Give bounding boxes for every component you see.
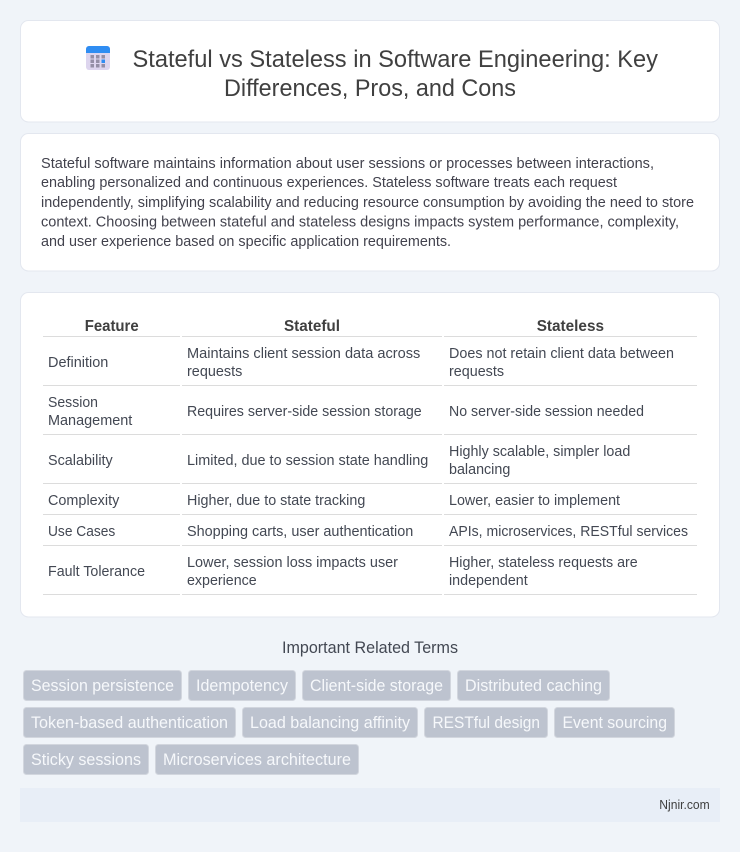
table row: Scalability: Limited, due to session state handling	[187, 453, 428, 469]
tag: Idempotency: Idempotency	[196, 677, 289, 695]
table row: Fault Tolerance: Higher, stateless requests are	[449, 555, 638, 571]
tag: Client-side storage: Client-side storage	[310, 677, 443, 695]
table row: Use Cases	[43, 524, 697, 546]
panel: header	[20, 20, 720, 122]
heading: important related terms: Important Related Terms	[282, 639, 458, 657]
title: Stateful vs Stateless in Software Engineering: Key	[132, 46, 659, 73]
table row: Fault Tolerance: independent	[449, 573, 528, 589]
table row: Definition	[43, 346, 697, 386]
text block: introduction paragraph: independently, simplifying scalability and reducing resource consumption by avoiding the need to store	[41, 195, 694, 211]
table row: Scalability: Highly scalable, simpler load	[449, 444, 630, 460]
panel: related term tags	[24, 670, 674, 774]
table row: Fault Tolerance: Lower, session loss impacts user	[187, 555, 398, 571]
table row: Scalability: Scalability	[48, 453, 113, 469]
table header row	[43, 318, 697, 337]
table row: Session Management: Session	[48, 395, 98, 411]
table row: Fault Tolerance: Fault Tolerance	[48, 564, 145, 580]
footer: Njnir.com	[659, 797, 710, 812]
tag: Load balancing affinity: Load balancing affinity	[250, 714, 411, 732]
table row: Scalability: balancing	[449, 462, 510, 478]
table row: Session Management: Management	[48, 413, 132, 429]
text block: introduction paragraph: Stateful software maintains information about user sessions or processes between interactions,	[41, 156, 654, 172]
table row: Complexity: Higher, due to state tracking	[187, 493, 365, 509]
tag: Token-based authentication: Token-based authentication	[31, 714, 228, 732]
table row: Complexity	[43, 493, 697, 515]
tag: Distributed caching: Distributed caching	[465, 677, 602, 695]
text block: introduction paragraph: context. Choosing between stateful and stateless designs impacts system performance, complexity,	[41, 214, 679, 230]
table row: Complexity: Lower, easier to implement	[449, 493, 620, 509]
tag: Idempotency	[188, 670, 296, 700]
table row: Use Cases: Use Cases	[48, 524, 115, 540]
panel: comparison table	[20, 292, 720, 617]
table header row: Feature	[85, 318, 139, 335]
title: Differences, Pros, and Cons	[224, 75, 516, 102]
table row: Definition: Does not retain client data between	[449, 346, 674, 362]
tag: Token-based authentication	[24, 708, 236, 738]
tag: Event sourcing: Event sourcing	[562, 714, 667, 732]
table row: Definition: Definition	[48, 355, 108, 371]
tag: Distributed caching	[458, 670, 610, 700]
tag: Event sourcing	[554, 708, 674, 738]
text block: introduction paragraph	[41, 156, 694, 250]
footer	[20, 788, 720, 822]
tag: Client-side storage	[302, 670, 450, 700]
tag: RESTful design	[424, 708, 548, 738]
table row: Session Management: No server-side session needed	[449, 404, 644, 420]
table row: Use Cases: Shopping carts, user authentication	[187, 524, 413, 540]
title	[132, 46, 659, 102]
table row: Use Cases: APIs, microservices, RESTful services	[449, 524, 688, 540]
tag: Sticky sessions	[24, 744, 148, 774]
table row: Definition: Maintains client session data across	[187, 346, 420, 362]
table row: Complexity: Complexity	[48, 493, 120, 509]
tag: Microservices architecture: Microservices architecture	[163, 751, 351, 769]
tag: Session persistence: Session persistence	[31, 677, 174, 695]
tag: RESTful design: RESTful design	[432, 714, 540, 732]
tag: Microservices architecture	[156, 744, 358, 774]
panel: introduction	[20, 134, 720, 271]
tag: Session persistence	[24, 670, 182, 700]
table row: Definition: requests	[449, 364, 504, 380]
icon: calendar	[86, 46, 110, 70]
table row: Session Management	[43, 395, 697, 435]
tag: Load balancing affinity	[242, 708, 418, 738]
text block: introduction paragraph: enabling personalized and continuous experiences. Stateless software treats each request	[41, 175, 617, 191]
table row: Fault Tolerance	[43, 555, 697, 595]
table row: Session Management: Requires server-side session storage	[187, 404, 422, 420]
tag: Sticky sessions: Sticky sessions	[31, 751, 141, 769]
table row: Scalability	[43, 444, 697, 484]
table row: Definition: requests	[187, 364, 242, 380]
table row: Fault Tolerance: experience	[187, 573, 257, 589]
table header row: Stateless	[537, 318, 604, 335]
text block: introduction paragraph: and user experience based on specific application requirements.	[41, 234, 451, 250]
table header row: Stateful	[284, 318, 340, 335]
